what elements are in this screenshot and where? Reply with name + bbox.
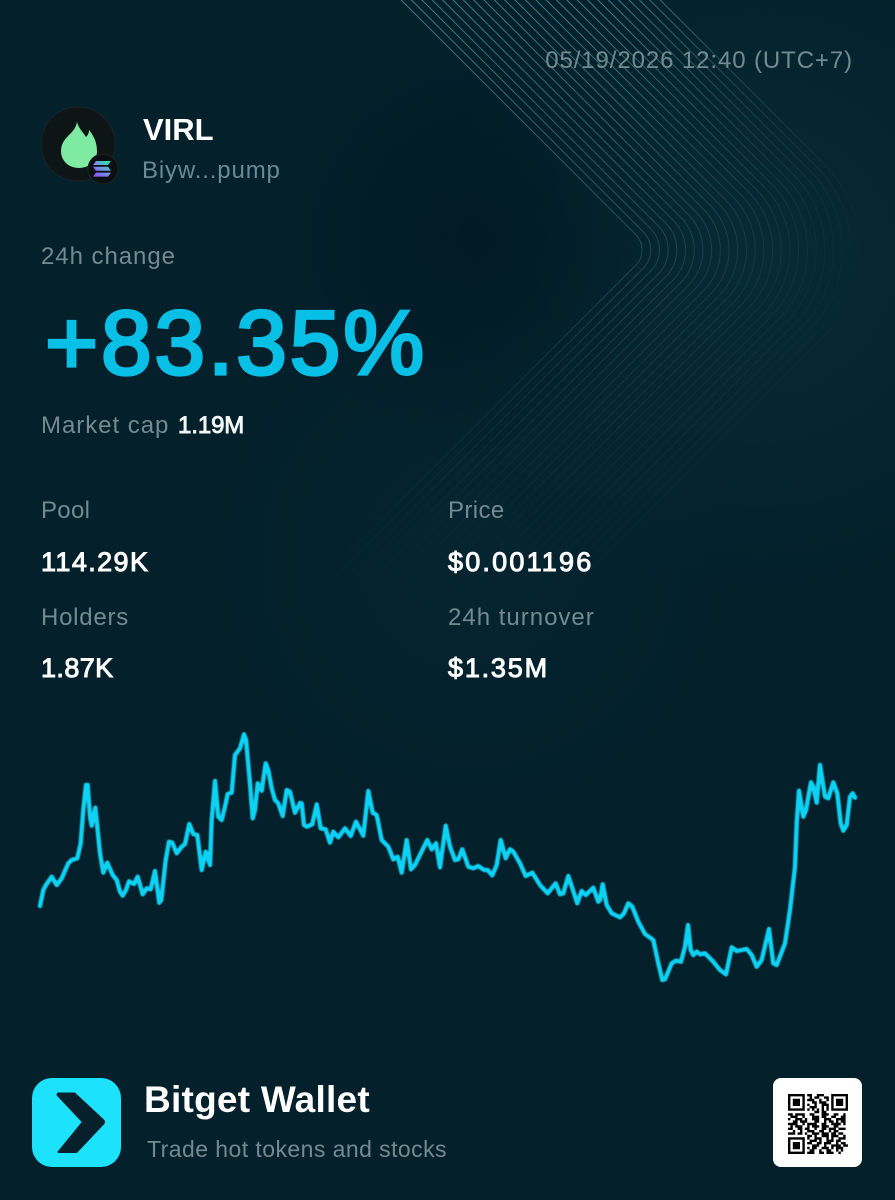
icon: token flame avatar with Solana badge bbox=[41, 107, 118, 184]
stat: pool: 114.29K bbox=[41, 547, 149, 577]
24h change label: 24h change bbox=[41, 243, 176, 270]
timestamp: 05/19/2026 12:40 (UTC+7) bbox=[545, 47, 853, 74]
24h change block bbox=[41, 243, 427, 439]
market cap: 1.19M bbox=[178, 412, 244, 439]
stat: 24h turnover: $1.35M bbox=[448, 653, 549, 683]
stat: holders: 1.87K bbox=[41, 653, 114, 683]
stat: pool bbox=[41, 497, 149, 577]
stat: price: $0.001196 bbox=[448, 547, 593, 577]
icon: Bitget Wallet logo bbox=[32, 1078, 121, 1167]
stat: 24h turnover: 24h turnover bbox=[448, 604, 595, 631]
stats grid bbox=[41, 497, 595, 683]
token name: VIRL bbox=[143, 112, 214, 147]
stat: holders: Holders bbox=[41, 604, 129, 631]
brand name: Bitget Wallet bbox=[144, 1079, 370, 1120]
footer brand bbox=[32, 1078, 447, 1167]
background chevron line pattern bbox=[400, 0, 832, 484]
stat: 24h turnover bbox=[448, 604, 595, 683]
QR code bbox=[773, 1078, 862, 1167]
token address: Biyw...pump bbox=[142, 157, 281, 184]
tagline: Trade hot tokens and stocks bbox=[147, 1136, 447, 1162]
stat: price bbox=[448, 497, 593, 577]
market cap: Market cap bbox=[41, 412, 169, 439]
price line chart bbox=[40, 734, 855, 980]
24h change value: +83.35% bbox=[45, 293, 427, 394]
stat: pool: Pool bbox=[41, 497, 90, 524]
market cap bbox=[41, 412, 244, 439]
stat: holders bbox=[41, 604, 129, 683]
token header bbox=[41, 107, 281, 184]
stat: price: Price bbox=[448, 497, 505, 524]
